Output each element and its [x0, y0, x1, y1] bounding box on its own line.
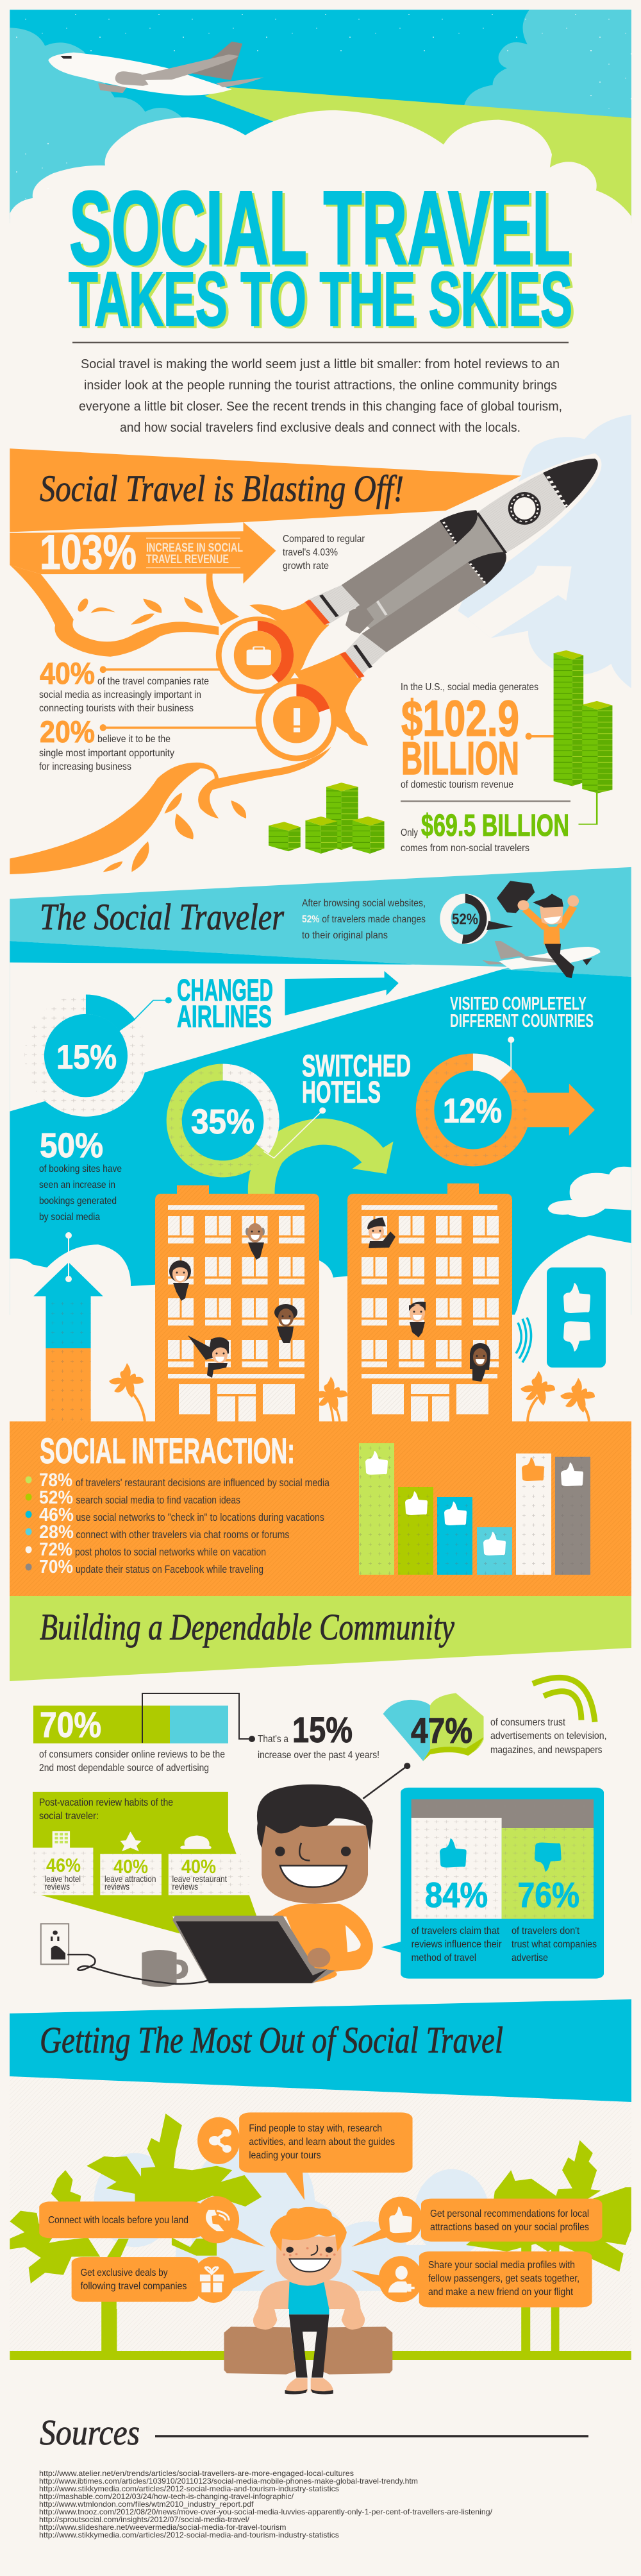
- text: 52% changes: After browsing social websites,: [302, 898, 426, 909]
- text: share profiles: [428, 2260, 579, 2298]
- building: left hotel: [155, 1185, 319, 1423]
- icon: gift: [200, 2267, 224, 2292]
- character: red-haired traveler: [258, 2207, 361, 2309]
- icon: power outlet and cord: [41, 1924, 208, 1984]
- flame 2: [294, 652, 362, 740]
- icon: man with laptop: [172, 1784, 373, 1983]
- label: changed airlines: AIRLINES: [177, 1000, 272, 1034]
- text: 52% changes: 52%: [452, 911, 478, 928]
- stat: 40%: social media as increasingly important in: [39, 690, 201, 700]
- text: find people: [249, 2123, 395, 2161]
- heading: building a dependable community: Building a Dependable Community: [40, 1606, 454, 1648]
- text: review habits: Post-vacation review habits of the: [39, 1797, 173, 1808]
- stat: $69.5 billion: comes from non-social travelers: [401, 843, 529, 854]
- text: personal recommendations: attractions based on your social profiles: [430, 2222, 589, 2233]
- source list: http://www.ibtimes.com/articles/103910/20110123/social-media-mobile-phones-make-global-travel-trendy.htm: [39, 2477, 418, 2486]
- stat: 50%: seen an increase in: [39, 1180, 115, 1191]
- leader lines: [100, 666, 597, 824]
- flame 1: [249, 599, 329, 673]
- big white cloud: [10, 110, 631, 258]
- money stacks small: [269, 783, 385, 854]
- text: connect with locals: Connect with locals before you land: [48, 2215, 188, 2226]
- stat: 15% increase: That's a: [258, 1734, 288, 1745]
- label: changed airlines: [177, 974, 273, 1034]
- label: visited different countries: [450, 994, 594, 1031]
- stat: $102.9 billion: [401, 682, 538, 790]
- stat: 40%: of the travel companies rate: [97, 676, 209, 687]
- list: social stats: 72%: [39, 1539, 72, 1560]
- icon: open book: [383, 1693, 484, 1761]
- list: social stats: 70%: [39, 1557, 73, 1577]
- palms: [109, 1363, 595, 1421]
- text: review habits: social traveler:: [39, 1811, 99, 1822]
- source list: http://www.tnooz.com/2012/08/20/news/move-over-you-social-media-luvvies-apparently-only-1-per-cent-of-travellers-are-listening/: [39, 2507, 493, 2516]
- intro text: Social travel is making the world seem just a little bit smaller: from hotel reviews to an: [81, 357, 560, 371]
- text: share profiles: Share your social media profiles with: [428, 2260, 575, 2271]
- stat: 47% trust ads: of consumers trust: [490, 1717, 565, 1728]
- icon: mug: [142, 1950, 188, 1987]
- stat: 50%: of booking sites have: [39, 1164, 122, 1174]
- text: compared to regular: travel's 4.03%: [283, 547, 338, 558]
- stat: 47% trust ads: [411, 1710, 606, 1756]
- panel: review habits: [33, 1792, 257, 1934]
- text: review habits: 40%: [181, 1856, 216, 1877]
- text: compared to regular: [283, 534, 365, 572]
- stat: 103%: [40, 525, 243, 580]
- text: find people: leading your tours: [249, 2150, 321, 2161]
- stat: 50%: [39, 1126, 122, 1223]
- label: changed airlines: CHANGED: [177, 974, 273, 1008]
- text: personal recommendations: Get personal recommendations for local: [430, 2208, 589, 2219]
- stat: 20%: single most important opportunity: [39, 748, 174, 759]
- money stacks tall: [554, 650, 612, 793]
- stat: 50%: 50%: [40, 1126, 103, 1165]
- icon: signal arcs: [533, 1677, 595, 1722]
- stat: 70% bar: 2nd most dependable source of advertising: [39, 1763, 209, 1774]
- text: review habits: leave attraction: [104, 1874, 156, 1884]
- palm trunks lower: [101, 2309, 560, 2352]
- text: 52% changes: to their original plans: [302, 930, 388, 941]
- source list: http://www.wtmlondon.com/files/wtm2010_industry_report.pdf: [39, 2500, 254, 2509]
- card: thumbs up and down: [547, 1267, 606, 1368]
- text: review habits: 40%: [113, 1856, 148, 1877]
- stats: 84% and 76%: advertise: [512, 1953, 548, 1963]
- source list: http://www.atelier.net/en/trends/articles/social-travellers-are-more-engaged-local-cultures: [39, 2469, 354, 2478]
- source list: http://mashable.com/2012/03/24/how-tech-is-changing-travel-infographic/: [39, 2492, 294, 2501]
- number: 15%: 15%: [56, 1038, 117, 1076]
- text: find people: Find people to stay with, research: [249, 2123, 382, 2134]
- stat: 15% increase: [258, 1709, 379, 1761]
- text: review habits: leave hotel: [45, 1874, 81, 1884]
- icon: airplane: [48, 42, 263, 96]
- light blue cloud behind rocket: [458, 415, 631, 688]
- flame swirl lower: [10, 747, 331, 874]
- icon: man flying on plane: [483, 881, 600, 978]
- list: social stats: connect with other travelers via chat rooms or forums: [76, 1529, 290, 1541]
- stat: 20%: [39, 715, 174, 772]
- intro text: insider look at the people running the tourist attractions, the online community brings: [84, 378, 557, 393]
- stat: $102.9 billion: of domestic tourism revenue: [401, 779, 513, 790]
- stat: 20%: 20%: [40, 715, 95, 749]
- stats: 84% and 76%: 76%: [518, 1875, 579, 1915]
- stat: 47% trust ads: advertisements on television,: [490, 1731, 606, 1741]
- header band: [10, 867, 631, 977]
- source list: http://www.slideshare.net/weevermedia/social-media-for-travel-tourism: [39, 2523, 286, 2532]
- stat: 103%: INCREASE IN SOCIAL: [146, 541, 243, 555]
- panel: social interaction: [10, 1421, 631, 1596]
- arrow: changed airlines: [285, 971, 399, 1015]
- stat: $102.9 billion: BILLION: [401, 733, 519, 784]
- left sky cloud: [10, 28, 182, 223]
- stat: $102.9 billion: In the U.S., social media generates: [401, 682, 538, 693]
- intro text: and how social travelers find exclusive deals and connect with the locals.: [120, 421, 520, 435]
- right sky cloud: [464, 10, 631, 118]
- curved arrow lime: [248, 1119, 394, 1196]
- panel: building a dependable community: [10, 1596, 631, 1987]
- stat: 15% increase: 15%: [292, 1709, 353, 1750]
- blue background: [10, 941, 631, 1315]
- hatched background: [10, 2072, 631, 2351]
- icon: donut 20% with exclamation: [256, 678, 337, 761]
- list: social stats: [26, 1470, 329, 1577]
- white arrow inside cloud: [458, 566, 572, 638]
- green ground: [10, 2351, 631, 2360]
- list: social stats: update their status on Facebook while traveling: [76, 1563, 263, 1575]
- stats: 84% and 76%: [412, 1838, 597, 1963]
- panel: the social traveler: [10, 867, 631, 1423]
- heading: blasting off: Social Travel is Blasting Off!: [40, 468, 404, 509]
- stat: 47% trust ads: magazines, and newspapers: [490, 1745, 603, 1756]
- characters in windows: [169, 1217, 490, 1382]
- flame droplets: [76, 597, 368, 872]
- icon: rocket: [308, 459, 598, 678]
- list: social stats: 28%: [39, 1522, 74, 1543]
- stat: 103%: TRAVEL REVENUE: [146, 553, 229, 566]
- heading: social interaction: SOCIAL INTERACTION:: [40, 1430, 295, 1471]
- icon: thumb: [389, 2207, 412, 2233]
- list: social stats: 78%: [39, 1470, 72, 1491]
- text: exclusive deals: Get exclusive deals by: [81, 2267, 167, 2278]
- number: 35%: 35%: [191, 1103, 254, 1141]
- panel: sources: [39, 2413, 588, 2539]
- building: right hotel: [347, 1183, 512, 1423]
- list: social stats: search social media to find vacation ideas: [76, 1494, 240, 1506]
- stat: 70% bar: 70%: [40, 1704, 101, 1745]
- speech bubble: find people: [197, 2112, 413, 2200]
- source list: [39, 2469, 493, 2539]
- stat: 103%: 103%: [40, 525, 137, 580]
- title: [69, 170, 575, 344]
- stat: $69.5 billion: Only: [401, 827, 418, 838]
- source list: http://www.stikkymedia.com/articles/2012-social-media-and-tourism-industry-statistics: [39, 2484, 339, 2493]
- text: compared to regular: growth rate: [283, 561, 329, 572]
- list: social stats: 52%: [39, 1487, 73, 1508]
- heading: sources: Sources: [40, 2413, 140, 2453]
- orange arrow: [10, 522, 276, 584]
- text: review habits: reviews: [45, 1881, 70, 1892]
- icon: donut 40% with briefcase: [216, 616, 299, 694]
- stat: $69.5 billion: [401, 809, 569, 854]
- heading: the social traveler: The Social Traveler: [40, 896, 284, 938]
- icon: add person: [388, 2266, 415, 2292]
- stat: 50%: by social media: [39, 1212, 100, 1223]
- stat: 15% increase: increase over the past 4 years!: [258, 1750, 379, 1761]
- donut: 15%: [24, 995, 172, 1117]
- arrow: up arrow: [33, 1232, 103, 1423]
- source list: http://www.stikkymedia.com/articles/2012-social-media-and-tourism-industry-statistics: [39, 2530, 339, 2539]
- text: review habits: reviews: [172, 1881, 198, 1892]
- heading: getting the most out: Getting The Most Out of Social Travel: [40, 2019, 503, 2061]
- list: social stats: use social networks to "check in" to locations during vacations: [76, 1511, 324, 1523]
- label: switched hotels: HOTELS: [302, 1076, 381, 1110]
- label: switched hotels: SWITCHED: [302, 1049, 411, 1083]
- speech bubble: recommendations: [352, 2197, 602, 2247]
- icon: signal waves: [516, 1318, 531, 1362]
- text: exclusive deals: following travel companies: [81, 2281, 187, 2292]
- panel: getting the most out of social travel: [10, 1999, 631, 2394]
- stat: 70% bar: [33, 1693, 255, 1774]
- stat: 20%: for increasing business: [39, 761, 131, 772]
- small cloud right: [548, 1167, 631, 1217]
- stat: 20%: believe it to be the: [97, 734, 171, 745]
- stat: 70% bar: of consumers consider online reviews to be the: [39, 1749, 225, 1760]
- text: review habits: 46%: [46, 1855, 81, 1876]
- panel: social travel is blasting off: [10, 415, 631, 874]
- text: compared to regular: Compared to regular: [283, 534, 365, 545]
- intro text: [79, 357, 562, 435]
- list: social stats: post photos to social networks while on vacation: [75, 1546, 266, 1558]
- speech bubble: share profiles: [352, 2251, 592, 2307]
- stat: 40%: 40%: [40, 656, 95, 690]
- list: social stats: of travelers' restaurant decisions are influenced by social media: [76, 1477, 329, 1489]
- intro text: everyone a little bit closer. See the recent trends in this changing face of global tourism,: [79, 400, 562, 414]
- donut: 35%: [167, 1064, 326, 1177]
- character lower body with suitcases: [224, 2307, 392, 2394]
- stats: 84% and 76%: 84%: [425, 1875, 488, 1915]
- flame swirl upper: [10, 565, 219, 657]
- panel: trust comparison: [381, 1788, 604, 1979]
- text: share profiles: fellow passengers, get seats together,: [428, 2273, 579, 2284]
- text: personal recommendations: [430, 2208, 589, 2233]
- donut: 12%: [416, 1037, 595, 1166]
- leader line: [363, 1766, 407, 1799]
- text: share profiles: and make a new friend on your flight: [428, 2287, 573, 2298]
- white ground clouds: [10, 1244, 155, 1321]
- lime header band: [10, 1596, 631, 1681]
- panel: header sky: [10, 10, 631, 258]
- bar chart: [359, 1443, 590, 1575]
- text: review habits: leave restaurant: [172, 1874, 227, 1884]
- plane trail: [10, 963, 511, 1112]
- rocket halo: [304, 453, 601, 682]
- stat: 47% trust ads: 47%: [411, 1710, 472, 1750]
- blue header band: [10, 1999, 631, 2102]
- text: exclusive deals: [81, 2267, 187, 2292]
- text: find people: activities, and learn about the guides: [249, 2137, 395, 2148]
- stat: 50%: bookings generated: [39, 1196, 117, 1207]
- plane contrail: [204, 87, 631, 223]
- text: 52% changes: [302, 898, 478, 941]
- label: switched hotels: [302, 1049, 411, 1110]
- stats: 84% and 76%: reviews influence their: [412, 1939, 502, 1950]
- text: review habits: [39, 1797, 227, 1892]
- stat: 40%: connecting tourists with their business: [39, 703, 194, 714]
- pale clouds: [94, 2138, 489, 2291]
- icon: share: [209, 2129, 231, 2153]
- stats: 84% and 76%: trust what companies: [512, 1939, 597, 1950]
- stats: 84% and 76%: method of travel: [412, 1953, 476, 1963]
- text: review habits: reviews: [104, 1881, 129, 1892]
- stats: 84% and 76%: of travelers claim that: [412, 1926, 499, 1936]
- icon: phone: [206, 2210, 229, 2231]
- stats: 84% and 76%: of travelers don't: [512, 1926, 579, 1936]
- orange banner: [10, 448, 521, 532]
- stat: 40%: [39, 656, 209, 714]
- donut: 52%: [440, 894, 513, 944]
- source list: http://sproutsocial.com/insights/2012/07/social-media-travel/: [39, 2515, 250, 2524]
- palm trees: [10, 2114, 631, 2309]
- speech bubble: connect with locals: [39, 2196, 265, 2247]
- text: 52% changes: 52% of travelers made changes: [302, 914, 426, 925]
- stat: $102.9 billion: $102.9: [401, 690, 519, 747]
- number: 12%: 12%: [443, 1092, 502, 1130]
- list: social stats: 46%: [39, 1505, 74, 1525]
- stat: $69.5 billion: $69.5 BILLION: [421, 809, 569, 843]
- speech bubble: exclusive deals: [72, 2257, 265, 2303]
